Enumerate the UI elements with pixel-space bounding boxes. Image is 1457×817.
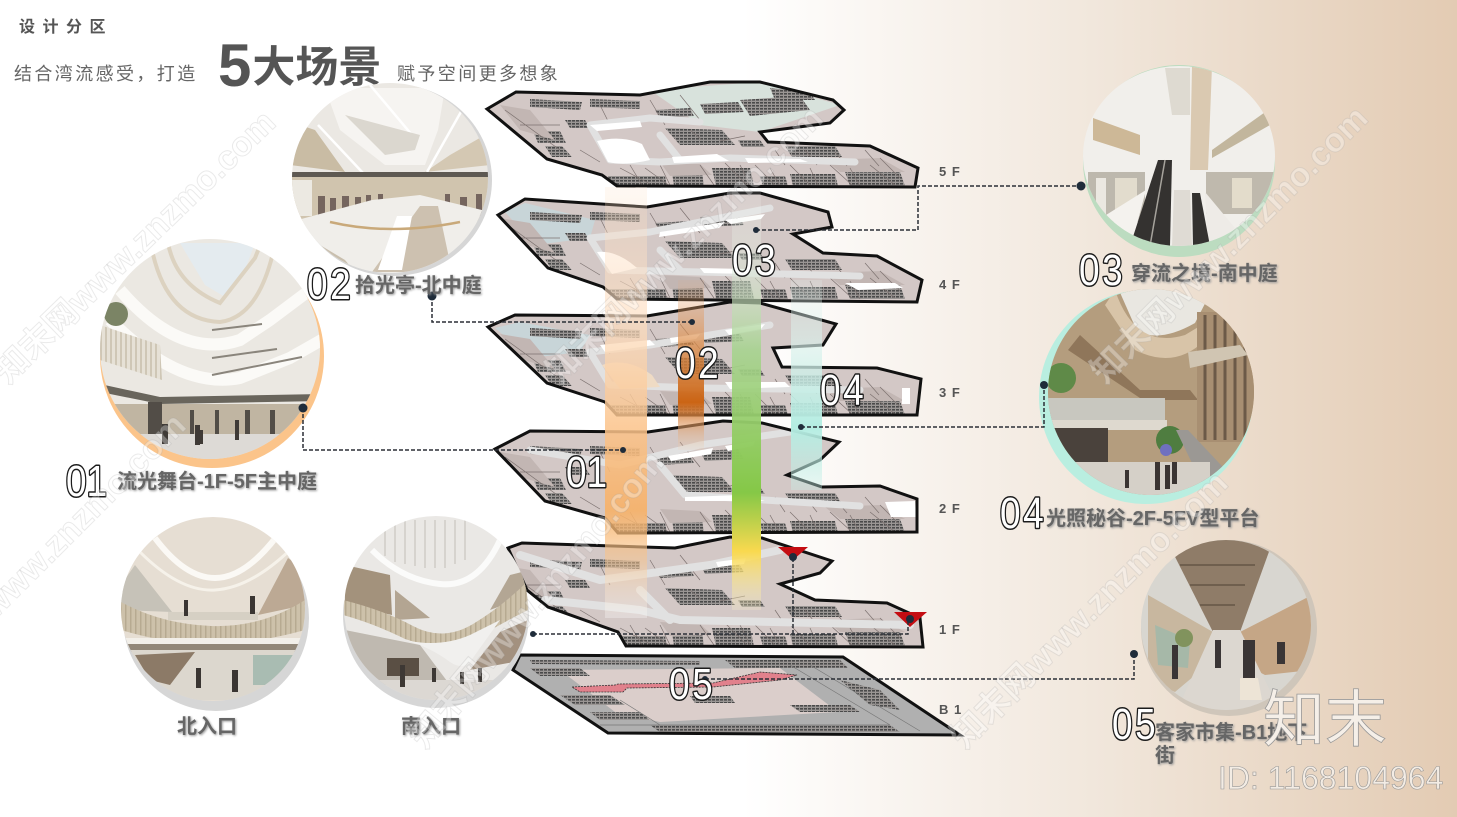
watermark: diagonal site marks: 知末网www.znzmo.com [402,444,672,755]
plan numbers on the stack: 02 [675,338,721,388]
caption: zone 05: 05 [1112,699,1158,749]
watermark: diagonal site marks: 知末网www.znzmo.com [1084,99,1376,391]
leader line: zone 01 [298,404,626,453]
watermark: brand mark: 知末 [1263,686,1387,755]
caption: zone 01: 流光舞台-1F-5F主中庭 [117,469,317,493]
caption: north entrance: 北入口 [177,715,237,738]
floor plan: 2F [495,421,917,533]
leader line: zone 03 [753,182,1086,233]
floor labels: 3 F [939,385,961,400]
plan numbers on the stack: 05 [669,659,715,709]
watermark: diagonal site marks [0,99,1376,756]
caption: zone 03: 03 [1079,245,1125,295]
photo: zone 01 main atrium [98,238,325,468]
leader line: zone 02 [428,292,695,325]
column: zone 03 [732,190,761,610]
floor labels [939,164,962,717]
floor labels: 5 F [939,164,961,179]
floor labels: B 1 [939,702,962,717]
header: title block [14,18,560,99]
big headline: 5 [218,32,251,99]
caption: south entrance: 南入口 [401,715,461,738]
caption: zone 04 [1000,488,1259,538]
leader lines: entrances with red markers [530,547,927,637]
photo: north entrance [120,515,310,711]
caption: zone 01: 01 [66,456,107,506]
column: zone 04 [791,280,822,490]
watermark: brand mark: ID: 1168104964 [1218,760,1443,796]
photo: zone 02 north atrium [290,80,492,280]
subtitle left: 结合湾流感受，打造 [14,64,198,84]
caption: zone 05: 客家市集-B1地下 [1155,720,1307,744]
caption: zone 03: 穿流之境-南中庭 [1131,261,1278,285]
floor plan: B1 [513,655,960,735]
caption: zone 02: 拾光亭-北中庭 [355,273,482,297]
caption: zone 01 [66,456,317,506]
photo: south entrance [340,515,535,708]
floor labels: 2 F [939,501,961,516]
plan numbers on the stack [566,235,866,709]
plan numbers on the stack: 04 [820,365,866,415]
caption: zone 04: 04 [1000,488,1046,538]
section label: 设计分区 [19,18,113,36]
floor plan: 5F [487,82,918,187]
caption: zone 03 [1079,245,1278,295]
plan numbers on the stack: 03 [732,235,778,285]
floor plan: 1F [500,537,923,647]
photo: zone 05 market street [1135,535,1320,720]
column: zone 02 [678,280,704,450]
photo: zone 04 light valley [1039,285,1260,504]
caption: zone 02 [307,259,482,309]
watermark: diagonal site marks: 知末网www.znzmo.com [944,464,1236,756]
column: zone 01 [605,187,647,618]
leader line: zone 05 [702,650,1138,682]
caption: zone 05 [1112,699,1307,767]
B1 route highlight [572,672,797,692]
caption: zone 02: 02 [307,259,353,309]
caption: zone 05: 街 [1155,744,1175,767]
subtitle right: 赋予空间更多想象 [397,64,560,84]
leader line: zone 04 [798,381,1048,430]
caption: zone 04: 光照秘谷-2F-5FV型平台 [1046,506,1259,530]
floor labels: 1 F [939,622,961,637]
watermark: diagonal site marks: 知末网www.znzmo.com [539,99,831,391]
floor plan: 4F [498,193,922,302]
floor plan: 3F [488,302,921,415]
big headline: 大场景 [252,44,381,92]
watermark: brand mark [1218,686,1443,796]
photo: zone 03 south atrium [1080,60,1280,257]
plan numbers on the stack: 01 [566,447,607,497]
floor labels: 4 F [939,277,961,292]
